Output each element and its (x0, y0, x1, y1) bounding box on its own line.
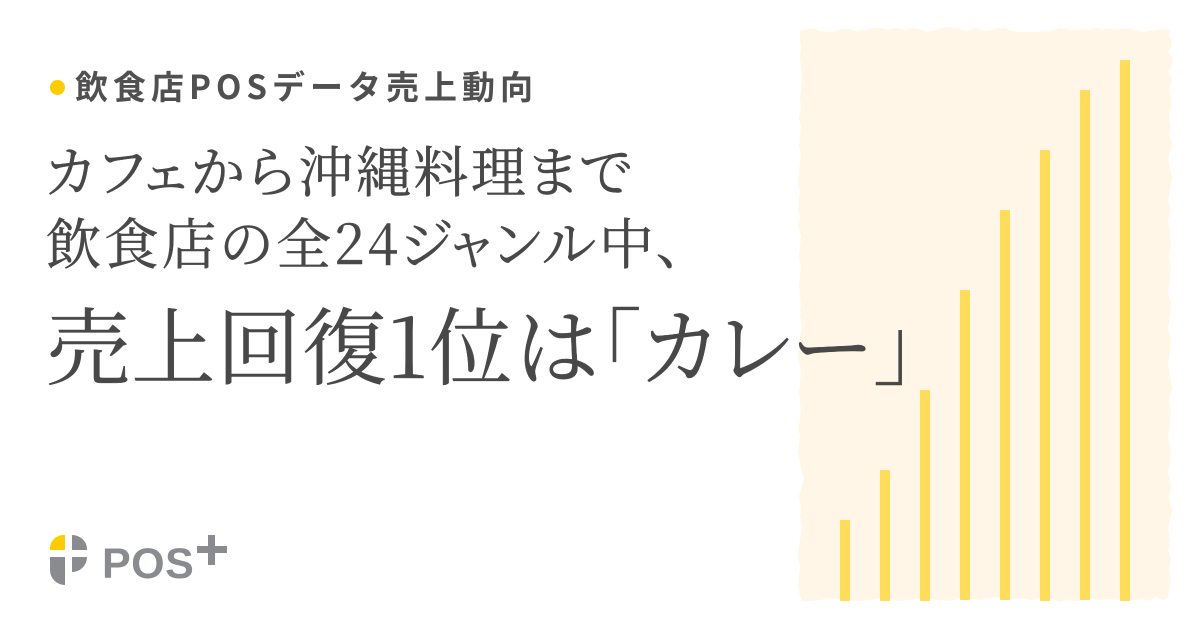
bar 4 (960, 290, 970, 600)
logo plus (197, 535, 227, 565)
logo: POS+ (50, 535, 227, 588)
bar 5 (1000, 210, 1010, 600)
bar 2 (880, 470, 890, 601)
bullet dot (50, 80, 65, 95)
title line 2: 飲食店の全24ジャンル中、 (46, 201, 687, 280)
title line 3: 売上回復1位は「カレー」 (46, 282, 917, 403)
logo wordmark: POS (102, 540, 194, 588)
bar 8 (1120, 60, 1130, 601)
category label: 飲食店POSデータ売上動向 (75, 61, 538, 109)
bar 6 (1040, 150, 1050, 601)
bar 3 (920, 390, 930, 601)
title line 1: カフェから沖縄料理まで (46, 129, 634, 208)
bar 1 (840, 520, 850, 601)
torn paper panel (798, 27, 1173, 602)
bar 7 (1080, 90, 1090, 600)
logo mark (50, 535, 87, 585)
